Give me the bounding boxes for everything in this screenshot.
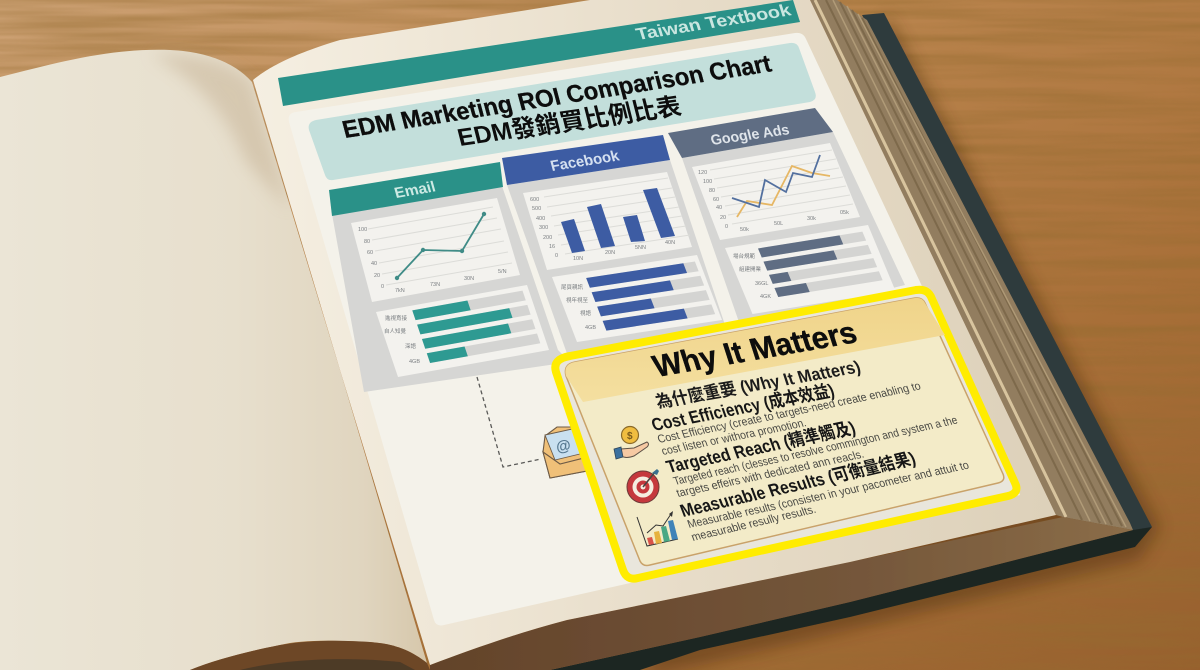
Google Ads bar labels: 組建開業 [739, 265, 762, 273]
Email line chart [351, 198, 520, 302]
book cover [550, 13, 1152, 670]
dashed connector to envelope [477, 377, 541, 467]
Facebook bar labels [561, 283, 596, 331]
Email bar labels: 進視育接 [385, 314, 408, 322]
callout header band [565, 298, 945, 402]
Facebook bar labels: 4GB [585, 325, 596, 331]
Google Ads line chart: 0 [725, 224, 728, 230]
Google Ads header: Google Ads [709, 122, 791, 149]
Email bar labels: 4GB [409, 359, 420, 365]
Facebook bar chart: 5NN [635, 245, 646, 251]
callout: Why It Matters [555, 290, 1016, 579]
Google Ads line chart [692, 143, 860, 240]
Google Ads bar labels: 36GL [755, 281, 768, 287]
Facebook horizontal bars [552, 255, 722, 342]
Google Ads line chart: 50k [740, 227, 749, 233]
Email header: Email [392, 179, 437, 202]
panel: Google Ads [668, 108, 905, 325]
Google Ads line chart: 60 [713, 197, 719, 203]
Email bar labels [384, 314, 420, 365]
item: Cost Efficiency: Cost Efficiency (create to targets-need create enabling to [656, 381, 923, 446]
icon: email envelope: @ [555, 437, 572, 456]
Facebook bar chart: 400 [536, 216, 545, 222]
Facebook bar chart: 500 [532, 206, 541, 212]
label: Taiwan Textbook: Taiwan Textbook [634, 1, 794, 44]
Email line chart: 80 [364, 239, 370, 245]
Google Ads line chart: 30k [807, 216, 816, 222]
Facebook bar labels: 尾頁親訊 [561, 283, 584, 291]
callout heading: Why It Matters [648, 315, 861, 384]
item: Targeted Reach [663, 415, 959, 500]
Email line chart: 100 [358, 227, 367, 233]
Email line chart: 30N [464, 276, 474, 282]
item: Measurable Results: measurable resully results. [690, 504, 818, 544]
Google Ads line chart: 100 [703, 179, 712, 185]
Facebook bar chart: 20N [605, 250, 615, 256]
left page bottom stack [190, 641, 430, 670]
Facebook bar labels: 視語 [580, 309, 592, 317]
Email bar chart [376, 285, 549, 377]
Google Ads line chart: 120 [698, 170, 707, 176]
Facebook bar chart: 40N [665, 240, 675, 246]
Email line chart: 5/N [498, 269, 507, 275]
Email line chart: 7kN [395, 288, 405, 294]
item: Targeted Reach: Targeted Reach (精準觸及) [663, 417, 858, 477]
panel: Email [329, 162, 570, 392]
Email line chart: 0 [381, 284, 384, 290]
item: Cost Efficiency: cost listen or withora promotion. [660, 417, 808, 458]
Google Ads bar labels: 場台規範 [733, 252, 756, 260]
Email line chart: 20 [374, 273, 380, 279]
Facebook bar chart: 200 [543, 235, 552, 241]
Email line chart: 40 [371, 261, 377, 267]
header band: Taiwan Textbook [278, 0, 800, 106]
Email bar labels: 自人知覺 [384, 327, 407, 335]
Google Ads header [668, 108, 833, 158]
callout subheading: 為什麼重要 (Why It Matters) [653, 357, 863, 412]
book page stack right [810, 0, 1133, 530]
Google Ads line chart: 80 [709, 188, 715, 194]
Google Ads line chart: 50L [774, 221, 783, 227]
icon: coin and hand: $ [627, 431, 633, 442]
item: Measurable Results: Measurable Results (可衡量結果) [677, 447, 918, 521]
Google Ads line chart: 05k [840, 210, 849, 216]
icon: growth chart [637, 511, 678, 546]
Google Ads bar labels: 4GK [760, 294, 771, 300]
Email bar labels: 深語 [405, 342, 417, 350]
bottom page stack [430, 517, 1133, 670]
item: Targeted Reach: Targeted reach (clesses to resolve commington and system a the [672, 415, 959, 488]
Google Ads line chart: 40 [716, 205, 722, 211]
item: Measurable Results: Measurable results (consisten in your pacometer and attuit to [686, 460, 971, 531]
Email header [329, 162, 503, 216]
Email line chart: 73N [430, 282, 440, 288]
icon: email envelope [543, 427, 592, 478]
item: Cost Efficiency: Cost Efficiency (成本效益) [648, 380, 837, 435]
Facebook bar labels: 視年視至 [566, 296, 589, 304]
left page [0, 50, 427, 670]
callout inner card [565, 298, 1004, 566]
icon: target [627, 469, 659, 503]
right page [253, 0, 1056, 665]
panel: title [309, 43, 816, 180]
Email line chart: 60 [367, 250, 373, 256]
callout yellow frame [555, 290, 1016, 579]
title: Chinese: EDM發銷買比例比表 [455, 93, 684, 152]
title: English: EDM Marketing ROI Comparison Chart [340, 51, 774, 144]
icon: coin and hand [614, 426, 648, 459]
panel: Facebook [502, 135, 730, 362]
Facebook bar chart: 10N [573, 256, 583, 262]
Facebook bar chart: 16 [549, 244, 555, 250]
Google Ads horizontal bars [725, 225, 896, 314]
Facebook bar chart: 600 [530, 197, 539, 203]
white sheet [289, 33, 1020, 625]
Google Ads bar labels [733, 252, 771, 300]
Facebook bar chart [523, 172, 692, 270]
Google Ads line chart: 20 [720, 215, 726, 221]
Facebook bar chart: 0 [555, 253, 558, 259]
left page spine shading [150, 54, 290, 210]
Facebook bar chart: 300 [539, 225, 548, 231]
Facebook header [502, 135, 670, 185]
item: Targeted Reach: targets effeirs with dedicated ann reacls. [675, 449, 866, 500]
Facebook header: Facebook [549, 148, 622, 175]
